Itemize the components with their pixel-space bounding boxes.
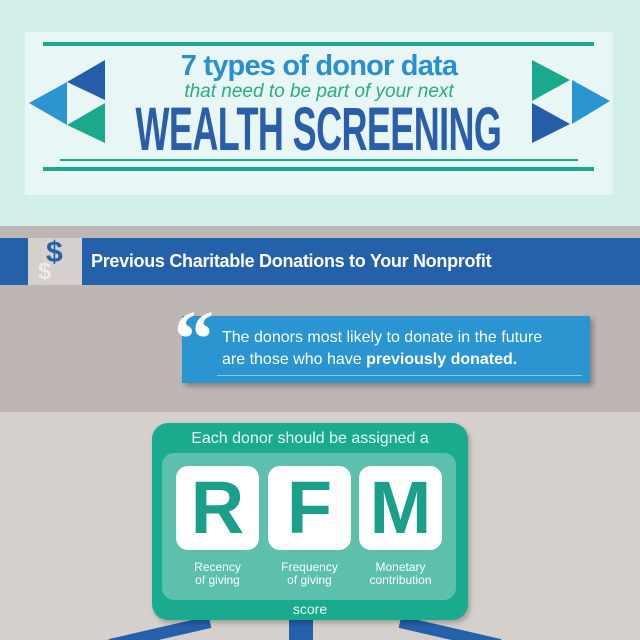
icon: left triangles <box>29 60 610 143</box>
label F: Frequency <box>281 560 338 574</box>
tile F <box>268 466 351 550</box>
title line 2: that need to be part of your next <box>184 81 454 102</box>
label F: of giving <box>287 573 332 587</box>
quote text: The donors most likely to donate in the future <box>222 329 542 346</box>
icon: quote mark: “ <box>174 296 214 384</box>
icon: right triangles <box>532 60 610 143</box>
label R: Recency <box>194 560 241 574</box>
title line 3: WEALTH SCREENING <box>136 95 501 163</box>
label M <box>369 560 432 587</box>
title line 1: 7 types of donor data <box>181 50 457 82</box>
icon: dollar: $ <box>46 236 63 269</box>
label R <box>194 560 241 587</box>
panel heading: Each donor should be assigned a <box>191 430 429 447</box>
label F <box>281 560 338 587</box>
decorative lines <box>43 42 594 46</box>
tile R: R <box>191 466 244 549</box>
icon: dollar: $ <box>38 258 51 285</box>
inner panel <box>162 453 456 600</box>
label R: of giving <box>195 573 240 587</box>
section title: Previous Charitable Donations to Your Nonprofit <box>91 251 491 271</box>
quote callout <box>182 316 590 383</box>
title panel <box>25 32 613 195</box>
RFM panel <box>152 423 468 620</box>
icon: dollar <box>28 238 82 285</box>
connector lines <box>108 620 502 640</box>
gray band <box>0 226 640 412</box>
quote text: are those who have previously donated. <box>222 351 517 368</box>
tile M: M <box>370 466 431 549</box>
label M: contribution <box>369 573 432 587</box>
score label: score <box>293 601 327 617</box>
section header bar <box>0 238 640 285</box>
tile R <box>176 466 259 550</box>
label M: Monetary <box>375 560 426 574</box>
quote text <box>222 329 542 368</box>
tile F: F <box>287 466 332 549</box>
header background <box>0 0 640 226</box>
